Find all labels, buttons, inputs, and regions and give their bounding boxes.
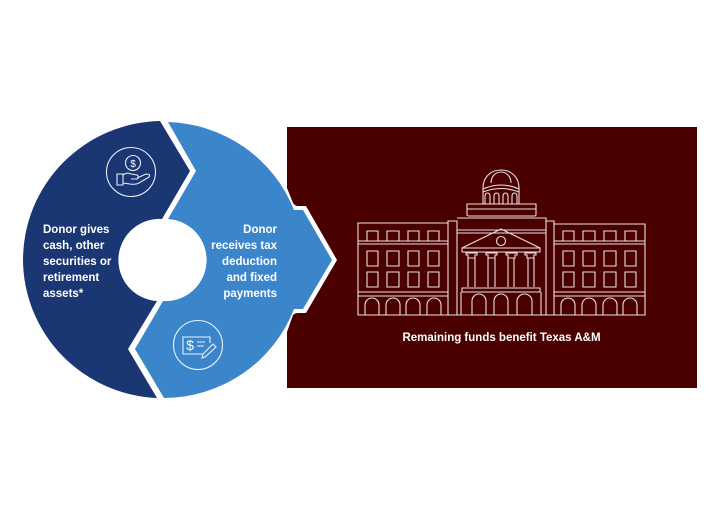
text: donor receives: deduction	[222, 256, 277, 268]
text: donor gives: Donor gives	[43, 224, 109, 236]
panel: donor receives	[135, 122, 332, 398]
pediment	[462, 229, 540, 252]
text: donor receives: payments	[223, 288, 277, 300]
heading: remaining funds: Remaining funds benefit Texas A&M	[402, 332, 601, 344]
panel: remaining funds	[287, 127, 697, 388]
portico base and arches	[461, 288, 541, 315]
text: donor receives	[211, 224, 278, 300]
icon label: dollar sign: $	[130, 159, 136, 170]
central block	[448, 204, 554, 315]
left wing	[358, 223, 448, 315]
icon: university building	[358, 170, 645, 315]
icon label: dollar sign: $	[186, 337, 194, 353]
text: donor gives	[43, 224, 112, 300]
dome	[483, 170, 519, 204]
columns	[466, 253, 536, 287]
text: donor receives: Donor	[243, 224, 278, 236]
text: donor receives: receives tax	[211, 240, 278, 252]
icon: check and pen	[174, 320, 222, 370]
text: donor gives: cash, other	[43, 240, 105, 252]
icon: hand holding coin	[106, 148, 156, 196]
text: donor gives: retirement	[43, 272, 99, 284]
text: donor gives: securities or	[43, 256, 112, 268]
text: donor gives: assets*	[43, 288, 84, 300]
panel: donor gives	[23, 121, 190, 398]
text: donor receives: and fixed	[227, 272, 277, 284]
right wing	[554, 224, 645, 315]
